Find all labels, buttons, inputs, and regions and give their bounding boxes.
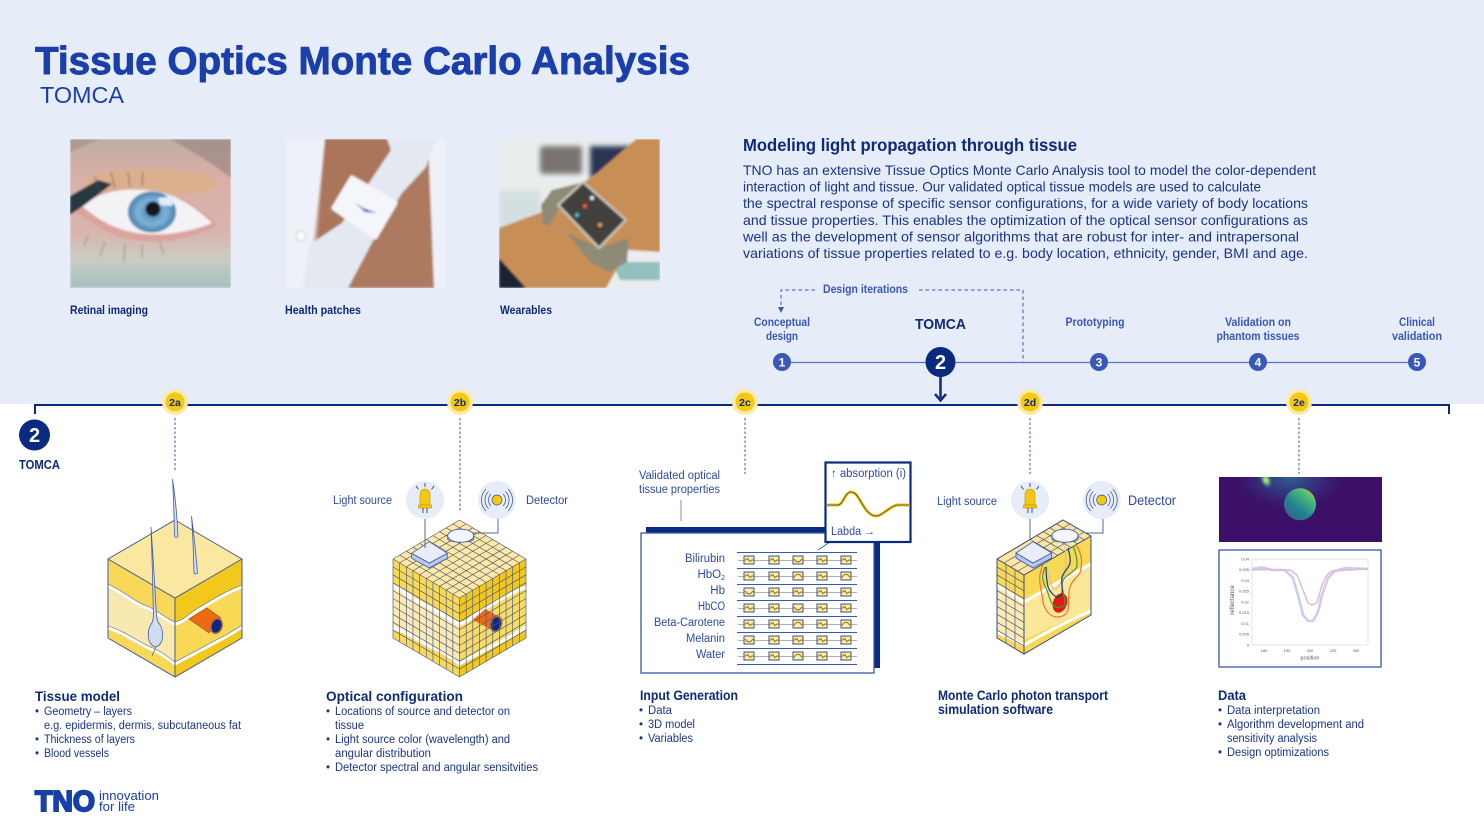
intro text block: TNO has an extensive Tissue Optics Monte Carlo Analysis tool to model the color-dependent xyxy=(743,162,1316,178)
text block: tissue model: • xyxy=(35,748,39,760)
icon: detector 2d xyxy=(1078,481,1121,533)
blood vessel xyxy=(189,608,224,635)
light source 2d label: Light source xyxy=(937,496,997,508)
light source block xyxy=(1016,542,1052,568)
hairs xyxy=(148,479,198,647)
step 1 xyxy=(754,317,810,371)
text block: Monte Carlo software: Monte Carlo photon transport xyxy=(938,687,1108,703)
design iterations loop xyxy=(778,284,1023,362)
row labels: 2 xyxy=(721,575,725,582)
reflectance chart: 220 xyxy=(1330,648,1337,653)
badge 2e: 2e xyxy=(1293,397,1305,409)
photo: wearables xyxy=(499,139,660,288)
text block: tissue model: Blood vessels xyxy=(44,748,109,760)
step 2 TOMCA: 2 xyxy=(935,352,946,374)
text block: optical configuration: • xyxy=(326,706,330,718)
row labels: Beta-Carotene xyxy=(654,617,725,629)
icon: LED 2b xyxy=(406,481,444,548)
detail bracket line xyxy=(35,405,1449,414)
text block: tissue model: Geometry – layers xyxy=(44,706,132,718)
text block: data: • xyxy=(1218,747,1222,759)
target inclusion xyxy=(1050,591,1070,615)
simulation heatmap xyxy=(1219,477,1382,542)
detector disc xyxy=(448,529,474,542)
text block: Monte Carlo software xyxy=(938,687,1108,717)
section marker TOMCA: 2 xyxy=(29,425,40,447)
text block: input generation: 3D model xyxy=(648,719,695,731)
step 3 xyxy=(1066,317,1124,371)
text block: data: Algorithm development and xyxy=(1227,719,1364,731)
text block: optical configuration: Light source color (wavelength) and xyxy=(335,734,510,746)
reflectance chart: 0.03 xyxy=(1241,578,1250,583)
arrow: TOMCA to detail xyxy=(935,376,946,400)
logo: TNO innovation for life: for life xyxy=(99,800,135,814)
row labels: Water xyxy=(696,649,725,661)
text block: optical configuration: Detector spectral and angular sensitvities xyxy=(335,762,538,774)
badge 2b xyxy=(447,389,473,415)
intro text block: and tissue properties. This enables the optimization of the optical sensor configurations as xyxy=(743,212,1308,228)
blue curve xyxy=(1252,568,1368,621)
reflectance chart: position xyxy=(1301,656,1319,662)
step 1: design xyxy=(766,331,798,343)
detector disc xyxy=(1052,529,1078,542)
text block: optical configuration: angular distribution xyxy=(335,748,431,760)
step 3: Prototyping xyxy=(1066,317,1124,329)
text block: data: • xyxy=(1218,719,1222,731)
design iterations loop: Design iterations xyxy=(823,284,908,296)
inset: absorption curve: ↑ absorption (i) xyxy=(831,468,906,480)
light source 2b label: Light source xyxy=(333,495,392,507)
badge 2c xyxy=(732,389,758,415)
reflectance chart: 240 xyxy=(1353,648,1360,653)
process timeline xyxy=(754,316,1442,377)
text block: tissue model: • xyxy=(35,734,39,746)
badge 2d: 2d xyxy=(1024,397,1036,409)
label: validated optical tissue properties xyxy=(639,470,720,521)
light source block xyxy=(412,542,447,568)
text block: optical configuration: • xyxy=(326,762,330,774)
reflectance chart: 190 xyxy=(1284,648,1291,653)
step 4 xyxy=(1216,317,1300,371)
inset: absorption curve: Labda → xyxy=(831,526,875,538)
step 1: Conceptual xyxy=(754,317,810,329)
badge 2b: 2b xyxy=(454,397,466,409)
logo: TNO innovation for life: innovation xyxy=(99,789,159,803)
caption: health patches: Health patches xyxy=(285,303,361,317)
text block: optical configuration: Optical configuration xyxy=(326,688,463,704)
text block: input generation xyxy=(639,687,738,745)
step 2 TOMCA: TOMCA xyxy=(915,316,966,333)
step 5: Clinical xyxy=(1399,317,1435,329)
text block: input generation: Input Generation xyxy=(640,687,738,703)
section marker TOMCA xyxy=(19,420,60,472)
text block: data: Data interpretation xyxy=(1227,705,1320,717)
reflectance chart: 0.04 xyxy=(1241,556,1250,562)
row labels: HbO xyxy=(697,569,721,581)
title: Tissue Optics Monte Carlo Analysis xyxy=(35,40,690,83)
photon paths xyxy=(1040,545,1082,617)
text block: Monte Carlo software: simulation software xyxy=(938,701,1053,717)
absorption mini charts xyxy=(744,556,851,660)
badge 2a: 2a xyxy=(169,397,181,409)
badge 2d xyxy=(1017,389,1043,415)
step 5: 5 xyxy=(1414,356,1421,370)
row labels: Bilirubin xyxy=(685,553,725,565)
text block: input generation: • xyxy=(639,733,643,745)
row labels: Hb xyxy=(710,585,725,597)
icon: detector 2b xyxy=(473,481,516,533)
inset: absorption curve xyxy=(826,462,910,542)
text block: optical configuration: tissue xyxy=(335,720,364,732)
text block: tissue model: Thickness of layers xyxy=(44,734,135,746)
icon: LED 2d xyxy=(1011,481,1049,548)
subtitle: TOMCA xyxy=(40,82,125,108)
reflectance chart: reflectance xyxy=(1230,585,1236,615)
text block: input generation: • xyxy=(639,705,643,717)
reflectance chart: 200 xyxy=(1307,648,1314,653)
illustration: Monte Carlo simulation block xyxy=(997,520,1091,654)
badge 2c: 2c xyxy=(739,397,751,409)
red curve xyxy=(1252,569,1368,605)
illustration: voxelised optical configuration cube xyxy=(393,520,526,677)
reflectance chart xyxy=(1219,550,1381,667)
text block: data: Design optimizations xyxy=(1227,747,1329,759)
reflectance chart: 0.035 xyxy=(1239,567,1250,572)
reflectance chart: 0.005 xyxy=(1239,632,1250,636)
intro text block: the spectral response of specific sensor configurations, for a wide variety of body locations xyxy=(743,195,1308,211)
reflectance chart: 0.015 xyxy=(1239,610,1250,615)
photo: retinal imaging xyxy=(70,139,231,288)
label: validated optical tissue properties: tissue properties xyxy=(639,484,720,496)
text block: optical configuration: • xyxy=(326,734,330,746)
intro text block xyxy=(742,162,1316,261)
text block: tissue model: • xyxy=(35,706,39,718)
text block: tissue model: Tissue model xyxy=(35,688,120,704)
dashed connectors xyxy=(175,418,1299,512)
section marker TOMCA: TOMCA xyxy=(19,458,60,472)
text block: tissue model xyxy=(35,688,242,760)
upper strap xyxy=(541,182,584,226)
logo: TNO innovation for life xyxy=(35,786,159,818)
step 4: phantom tissues xyxy=(1216,331,1300,343)
step 5 xyxy=(1392,317,1442,371)
text block: optical configuration xyxy=(326,688,538,774)
text block: data: sensitivity analysis xyxy=(1227,733,1317,745)
reflectance chart: 0 xyxy=(1247,642,1250,648)
row labels xyxy=(654,553,725,661)
caption: wearables: Wearables xyxy=(500,303,552,317)
intro text block: variations of tissue properties related to e.g. body location, ethnicity, gender, BMI and age. xyxy=(743,245,1308,261)
text block: data: • xyxy=(1218,705,1222,717)
step 4: Validation on xyxy=(1225,317,1291,329)
reflectance chart: 0.02 xyxy=(1241,600,1250,604)
detector 2b label: Detector xyxy=(526,495,568,507)
voxel grid xyxy=(393,520,526,677)
detector 2d label: Detector xyxy=(1128,493,1176,508)
step 5: validation xyxy=(1392,331,1442,343)
text block: tissue model: e.g. epidermis, dermis, subcutaneous fat xyxy=(44,720,242,732)
badge 2e xyxy=(1286,389,1312,415)
text block: input generation: Variables xyxy=(648,733,693,745)
text block: optical configuration: Locations of source and detector on xyxy=(335,706,510,718)
blood vessel xyxy=(473,609,504,633)
logo: TNO innovation for life: TNO xyxy=(35,786,95,818)
text block: input generation: • xyxy=(639,719,643,731)
panel: input table xyxy=(641,527,880,673)
text block: data: Data xyxy=(1218,687,1246,703)
label: validated optical tissue properties: Validated optical xyxy=(639,470,720,482)
intro text block: well as the development of sensor algorithms that are robust for inter- and intrapersonal xyxy=(742,228,1299,244)
text block: input generation: Data xyxy=(648,705,673,717)
step 4: 4 xyxy=(1255,356,1262,370)
step 2 TOMCA xyxy=(915,316,966,377)
reflectance chart: 180 xyxy=(1261,648,1268,653)
reflectance chart: 0.025 xyxy=(1239,588,1250,594)
caption: retinal imaging: Retinal imaging xyxy=(70,303,148,317)
badge 2a xyxy=(162,389,188,415)
row labels: Melanin xyxy=(686,633,725,645)
step 1: 1 xyxy=(779,356,786,370)
step 3: 3 xyxy=(1096,356,1103,370)
lower strap xyxy=(566,232,629,272)
reflectance chart: 0.01 xyxy=(1241,621,1250,626)
row labels: HbCO xyxy=(698,601,725,613)
text block: data xyxy=(1218,687,1364,759)
illustration: tissue cube xyxy=(108,479,242,677)
intro text block: interaction of light and tissue. Our validated optical tissue models are used to calculate xyxy=(743,178,1261,194)
intro heading: Modeling light propagation through tissue xyxy=(743,135,1077,155)
photo: health patches xyxy=(295,139,436,288)
